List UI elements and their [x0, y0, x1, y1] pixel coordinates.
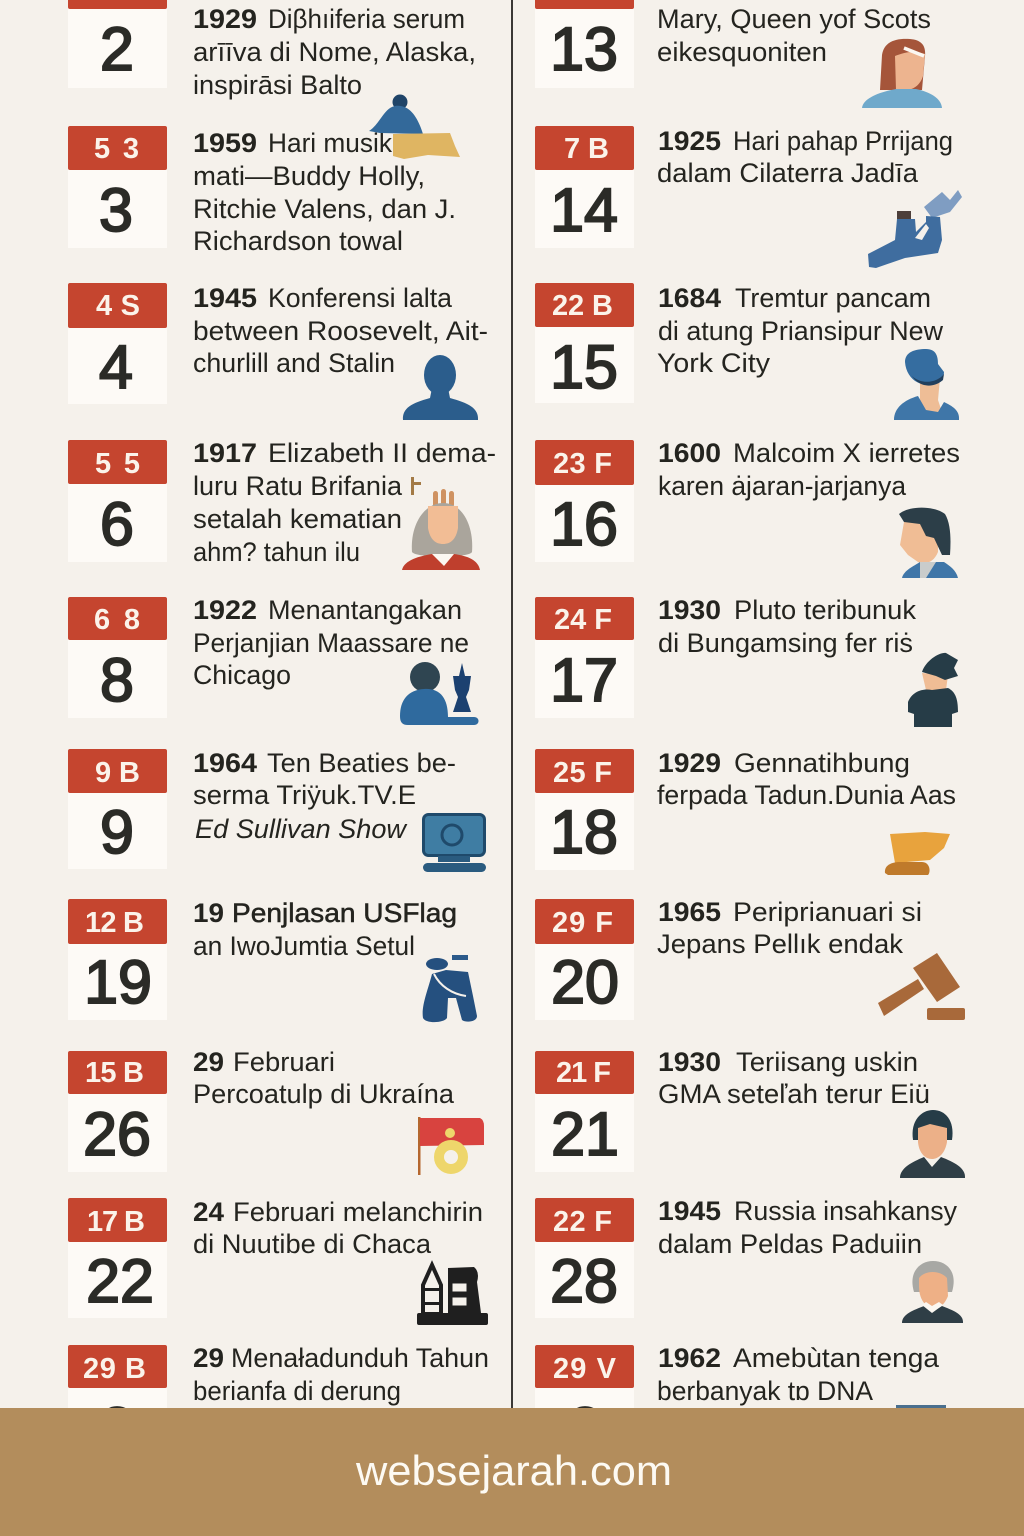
- text: 1945: 1945: [658, 1196, 721, 1226]
- text: 1684: di atung Priansipur New: [658, 316, 943, 346]
- calendar tile: 26: 15 B: [85, 1057, 144, 1089]
- calendar tile: cut off by footer: 2: [100, 1395, 134, 1463]
- calendar tile: 19: 12 B: [85, 907, 144, 939]
- footer band: [0, 1408, 1024, 1536]
- text: 1929: [193, 4, 476, 100]
- calendar tile: cut off by footer: 2: [568, 1395, 602, 1463]
- entry: 26 Februari: [68, 1047, 484, 1175]
- text: 29 Februari: [193, 1047, 455, 1109]
- text: 1925: 1925: [658, 126, 721, 156]
- text: 1964: serma Triÿuk.TV.E: [193, 780, 416, 810]
- calendar tile: 6: 5 5: [95, 448, 140, 480]
- calendar tile: 20: 20: [551, 948, 619, 1016]
- text: 24 Februari: 24: [193, 1197, 224, 1227]
- calendar tile: cut off by footer: 29 B: [83, 1353, 146, 1385]
- footer text: site name: websejarah.com: [355, 1447, 672, 1494]
- entry: 15 Februari 1684: [535, 283, 959, 420]
- text: 1600: [658, 438, 960, 501]
- calendar tile: 21: [535, 1051, 634, 1172]
- calendar tile: cut off by footer: [68, 1345, 167, 1463]
- entry: 18 Februari 1929: [535, 748, 956, 875]
- calendar tile: 20: 29 F: [552, 907, 613, 939]
- calendar tile: 26: [68, 1051, 167, 1172]
- text: 1929: Diβhıiferia serum: [268, 4, 465, 34]
- entry: 3 Februari 1959: [68, 94, 460, 256]
- text: 19 Penjlasan: an IwoJumtia Setul: [193, 931, 415, 961]
- text: 1929: 1929: [658, 748, 721, 778]
- text: 1922: Menantangakan: [268, 595, 462, 625]
- text: 1945: Konferensi lalta: [268, 283, 453, 313]
- text: 1600: Malcoim X ierretes: [733, 438, 960, 468]
- calendar tile: 22: 17 B: [87, 1206, 145, 1238]
- entry: 28 Februari 1945: [535, 1196, 963, 1323]
- calendar tile: 3: 3: [99, 176, 133, 244]
- calendar tile: 3: 5 3: [94, 133, 139, 165]
- calendar tile: cut off by footer: 29 V: [553, 1353, 617, 1385]
- text: 1945: [193, 283, 488, 378]
- text: 1925: [657, 126, 953, 188]
- calendar tile: 18: 18: [550, 798, 618, 866]
- text: 1922: Chicago: [193, 660, 291, 690]
- text: 1929: [657, 748, 956, 810]
- icon: hooded figure: [369, 94, 460, 159]
- text: 1930: di Bungamsing fer riṡ: [658, 628, 913, 658]
- text: 1922: Perjanjian Maassare ne: [193, 628, 469, 658]
- text: 24 Februari: [193, 1197, 483, 1259]
- text: 1929: Gennatihbung: [734, 748, 910, 778]
- text: 19 Penjlasan: [193, 898, 457, 961]
- text: 1600: karen ȧjaran-jarjanya: [658, 471, 907, 501]
- text: 1930: Pluto teribunuk: [734, 595, 916, 625]
- text: 1930: Teriisang uskin: [736, 1047, 918, 1077]
- calendar tile: 17: 24 F: [554, 604, 612, 636]
- calendar tile: 14: 7 B: [564, 133, 609, 165]
- text: 1930: 1930: [658, 595, 721, 625]
- text: 1929: ferpada Tadun.Dunia Aas: [657, 780, 956, 810]
- text: 1925: Hari pahap Prrijang: [733, 126, 953, 156]
- calendar tile: 8: [68, 597, 167, 718]
- text: 29 Menaadunduh: [193, 1343, 489, 1406]
- icon: soldiers raising flag: [423, 955, 477, 1022]
- calendar tile: 14: [535, 126, 634, 248]
- text: 1959: mati—Buddy Holly,: [193, 161, 425, 191]
- text: 1965: [657, 897, 922, 959]
- text: 1945: 1945: [193, 283, 257, 313]
- text: 29 Menaadunduh: 29: [193, 1343, 224, 1373]
- calendar tile: 22: 22: [86, 1247, 154, 1315]
- text: 1929: inspirāsi Balto: [193, 70, 362, 100]
- entry: 16 Februari 1600: [535, 438, 960, 578]
- icon: cut off by footer: [896, 1405, 946, 1411]
- calendar tile: 16: 16: [550, 490, 618, 558]
- entry: 2 Februari 1929: [68, 0, 476, 100]
- text: 1684: 1684: [658, 283, 721, 313]
- calendar tile: 9: 9: [100, 798, 134, 866]
- text: 1930: 1930: [658, 1047, 721, 1077]
- text: 1962: [657, 1343, 940, 1406]
- icon: gavel: [878, 953, 965, 1020]
- text: 1945: dalam Peldas Paduiin: [658, 1229, 922, 1259]
- calendar tile: 8: 6 8: [94, 604, 140, 636]
- entry: 21 Februari 1930: [535, 1047, 965, 1178]
- entry: 8 Februari 1922: [68, 595, 478, 725]
- entry: 22 Februari: [68, 1197, 488, 1325]
- calendar tile: 13: 13: [550, 15, 618, 83]
- calendar tile: 22: [68, 1198, 167, 1318]
- right column: [535, 0, 965, 1463]
- icon: queen portrait: [402, 477, 480, 570]
- calendar tile: 26: 26: [83, 1100, 151, 1168]
- text: 24 Februari: di Nuutibe di Chaca: [193, 1229, 432, 1259]
- text: 1917: 1917: [193, 438, 257, 468]
- calendar tile: 17: 17: [550, 646, 618, 714]
- text: 1600: 1600: [658, 438, 721, 468]
- entry: 9 Februari 1964: [68, 748, 486, 872]
- icon: officer portrait: [894, 349, 959, 420]
- entry: 20 Februari 1965: [535, 897, 965, 1020]
- text: 29 Februari: 29: [193, 1047, 224, 1077]
- text: 1684: Tremtur pancam: [735, 283, 931, 313]
- entry: 1 Maret 1962: [535, 1343, 946, 1463]
- text: 1930: GMA seteľah terur Eiü: [658, 1079, 930, 1109]
- text: 1930: [658, 595, 916, 658]
- text: 24 Februari: Februari melanchirin: [233, 1197, 483, 1227]
- calendar tile: 20: [535, 899, 634, 1020]
- text: Mary, Queen: Mary, Queen yof Scots: [657, 4, 931, 34]
- text: 1917: luru Ratu Brifania: [193, 471, 403, 501]
- entry: 19 Februari: [68, 898, 477, 1022]
- left column: [68, 0, 496, 1463]
- text: 29 Menaadunduh: berianfa di derung: [193, 1376, 401, 1406]
- calendar tile: 9: [68, 749, 167, 869]
- text: 1959: Hari musik: [268, 128, 392, 158]
- calendar tile: 4: 4: [99, 333, 133, 401]
- text: 1917: Elizabeth II dema-: [268, 438, 496, 468]
- text: 29 Februari: Februari: [233, 1047, 335, 1077]
- text: 1965: Periprianuari si: [733, 897, 922, 927]
- text: 1925: dalam Cilaterra Jadīa: [657, 158, 919, 188]
- calendar tile: 8: 8: [100, 646, 134, 714]
- text: 1959: Ritchie Valens, dan J.: [193, 194, 456, 224]
- text: 1684: York City: [657, 348, 771, 378]
- calendar tile: 2: [68, 0, 167, 88]
- text: 1922: [193, 595, 469, 690]
- calendar tile: 21: 21 F: [556, 1057, 611, 1089]
- calendar tile: 6: 6: [100, 490, 134, 558]
- icon: flag and medal: [418, 1117, 484, 1175]
- text: Mary, Queen: eikesquoniten: [657, 37, 827, 67]
- entry: 17 Februari 1930: [535, 595, 958, 727]
- calendar tile: 28: 22 F: [553, 1206, 612, 1238]
- icon: person hiding face: [908, 653, 958, 727]
- icon: man and chess piece: [400, 662, 478, 725]
- calendar tile: 19: [68, 899, 167, 1020]
- calendar tile: 17: [535, 597, 634, 718]
- calendar tile: 16: [535, 440, 634, 562]
- calendar tile: 18: 25 F: [553, 757, 612, 789]
- calendar tile: 4: 4 S: [96, 290, 140, 322]
- text: 1964: [193, 748, 456, 844]
- entry: 13 Februari: [535, 0, 942, 108]
- icon: Malcolm X portrait: [899, 508, 958, 578]
- text: 1945: between Roosevelt, Ait-: [193, 316, 488, 346]
- icon: boots and map: [868, 190, 962, 268]
- calendar tile: 9: 9 B: [95, 757, 140, 789]
- calendar tile: 19: 19: [84, 948, 152, 1016]
- text: 1962: berbanyak tɒ DNA: [657, 1376, 873, 1406]
- calendar tile: cut off by footer: [535, 1345, 634, 1463]
- calendar tile: 15: 15: [550, 333, 618, 401]
- text: 1965: 1965: [658, 897, 721, 927]
- calendar tile: 13: [535, 0, 634, 88]
- calendar tile: 18: [535, 749, 634, 870]
- text: 1917: ahm? tahun ilu: [193, 537, 360, 567]
- text: 1945: Russia insahkansy: [734, 1196, 957, 1226]
- calendar tile: 6: [68, 440, 167, 562]
- text: 1959: [193, 128, 456, 256]
- icon: amber trophy: [885, 832, 950, 875]
- icon: buildings: [417, 1265, 488, 1325]
- text: 1945: churlill and Stalin: [193, 348, 395, 378]
- text: 1917: [193, 438, 496, 567]
- text: 1930: [658, 1047, 930, 1109]
- entry: 6 Februari 1917: [68, 438, 496, 570]
- text: 1922: 1922: [193, 595, 257, 625]
- entry: 29 Februari: [68, 1343, 489, 1463]
- text: 19 Penjlasan: 19: [193, 898, 224, 928]
- text: 1962: 1962: [658, 1343, 721, 1373]
- calendar tile: 21: 21: [551, 1100, 619, 1168]
- text: Mary, Queen: [657, 4, 931, 67]
- text: 1964: 1964: [193, 748, 257, 778]
- text: 1945: [658, 1196, 957, 1259]
- calendar tile: 4: [68, 283, 167, 404]
- entry: 4 Februari 1945: [68, 283, 488, 420]
- text: 1964: Ten Beaties be-: [267, 748, 456, 778]
- text: 1917: setalah kematian: [193, 504, 402, 534]
- text: 29 Februari: Percoatulp di Ukraína: [193, 1079, 455, 1109]
- icon: Mary portrait: [862, 39, 942, 108]
- icon: man portrait: [900, 1110, 965, 1178]
- calendar tile: 2: 2: [100, 15, 134, 83]
- icon: television: [423, 814, 486, 872]
- entry: 14 Februari 1925: [535, 126, 962, 268]
- text: 1929: arīīva di Nome, Alaska,: [193, 37, 476, 67]
- text: 29 Menaadunduh: Menaładunduh Tahun: [231, 1343, 489, 1373]
- calendar tile: 15: [535, 283, 634, 403]
- icon: man silhouette: [403, 355, 478, 420]
- calendar tile: 16: 23 F: [553, 448, 612, 480]
- calendar tile: 28: 28: [550, 1247, 618, 1315]
- text: 1965: Jepans Pellık endak: [657, 929, 904, 959]
- text: 1962: Amebùtan tenga: [733, 1343, 940, 1373]
- calendar tile: 15: 22 B: [552, 290, 613, 322]
- calendar tile: 14: 14: [550, 176, 618, 244]
- text: 1684: [657, 283, 943, 378]
- icon: old man portrait: [902, 1261, 963, 1323]
- text: 19 Penjlasan: Penjlasan USFlag: [232, 898, 457, 928]
- text: 1929: 1929: [193, 4, 257, 34]
- text: 1964: Ed Sullivan Show: [195, 814, 408, 844]
- text: 1959: 1959: [193, 128, 257, 158]
- calendar tile: 28: [535, 1198, 634, 1318]
- text: 1959: Richardson towal: [193, 226, 403, 256]
- calendar tile: 3: [68, 126, 167, 248]
